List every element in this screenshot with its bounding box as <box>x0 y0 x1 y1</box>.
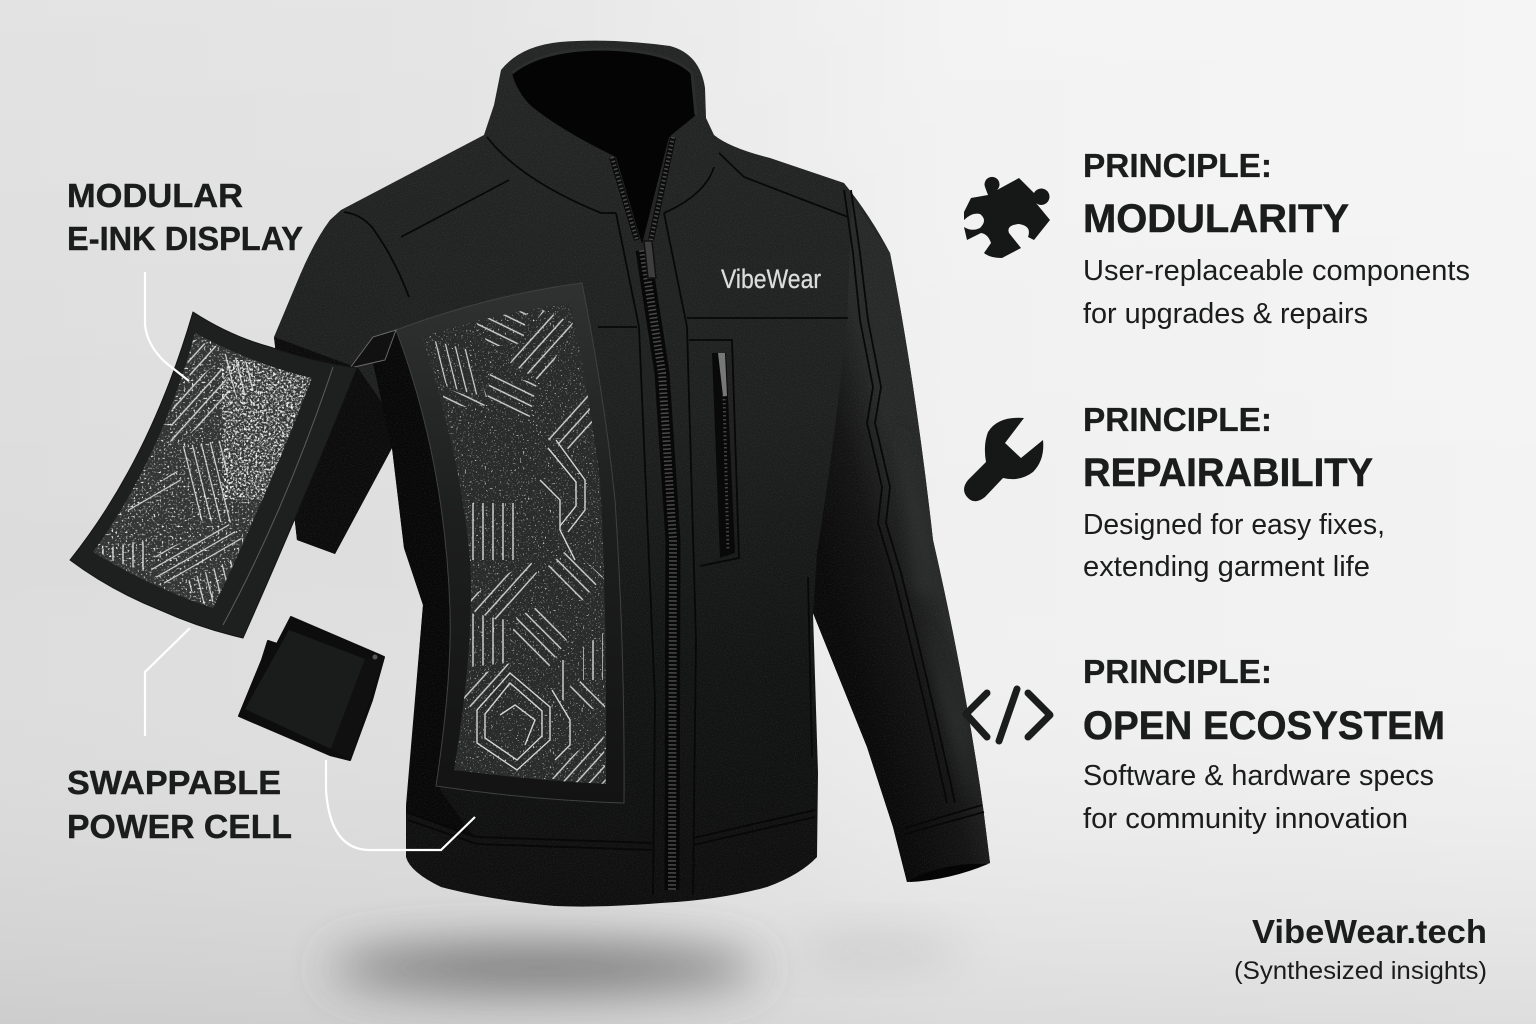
large e-ink panel <box>396 283 624 803</box>
principle: open ecosystem: OPEN ECOSYSTEM <box>1083 704 1445 748</box>
zipper <box>612 137 673 890</box>
sleeve highlights <box>918 566 963 752</box>
callout line: power cell to jacket <box>326 760 475 850</box>
label: swappable power cell <box>67 764 292 845</box>
footer: brand and source: (Synthesized insights) <box>1234 957 1487 985</box>
swappable power cell <box>239 617 384 760</box>
logo: VibeWear <box>721 264 821 294</box>
left sleeve stub shade <box>274 337 394 554</box>
label: modular e-ink display <box>67 177 303 257</box>
icon: puzzle piece <box>964 177 1050 258</box>
small detached e-ink panel <box>70 312 396 638</box>
collar seams <box>344 137 984 895</box>
callout line: e-ink display <box>145 272 189 381</box>
chest pocket <box>689 340 739 566</box>
principle: repairability: Designed for easy fixes, <box>1083 509 1385 541</box>
icon: wrench <box>964 418 1043 501</box>
right sleeve <box>813 198 990 882</box>
principle: repairability: PRINCIPLE: <box>1083 401 1272 438</box>
zipper pull <box>644 241 656 278</box>
footer: brand and source <box>1234 913 1487 985</box>
inner neck <box>512 49 696 244</box>
icon: code brackets <box>966 689 1050 741</box>
principle: modularity <box>1083 147 1470 330</box>
principle: open ecosystem: Software & hardware specs <box>1083 760 1434 792</box>
principle: repairability: REPAIRABILITY <box>1083 451 1373 495</box>
label: swappable power cell: SWAPPABLE <box>67 764 281 801</box>
principle: repairability: extending garment life <box>1083 551 1370 583</box>
label: swappable power cell: POWER CELL <box>67 808 292 845</box>
principle: repairability <box>1083 401 1385 583</box>
jacket <box>270 40 995 910</box>
floor shadow <box>330 942 970 990</box>
principle: modularity: User-replaceable components <box>1083 255 1470 287</box>
principle: open ecosystem: for community innovation <box>1083 803 1408 835</box>
left body shade <box>370 328 475 838</box>
sleeve connector <box>350 330 396 368</box>
label: modular e-ink display: E-INK DISPLAY <box>67 220 303 257</box>
principle: open ecosystem: PRINCIPLE: <box>1083 653 1272 690</box>
label: modular e-ink display: MODULAR <box>67 177 243 214</box>
callout line: power cell left <box>145 628 190 736</box>
principle: modularity: MODULARITY <box>1083 197 1349 241</box>
principle: modularity: for upgrades & repairs <box>1083 298 1368 330</box>
principle: modularity: PRINCIPLE: <box>1083 147 1272 184</box>
collar lip highlight <box>512 49 696 115</box>
cuff opening <box>910 864 988 882</box>
principle: open ecosystem <box>1083 653 1445 835</box>
footer: brand and source: VibeWear.tech <box>1252 913 1487 950</box>
